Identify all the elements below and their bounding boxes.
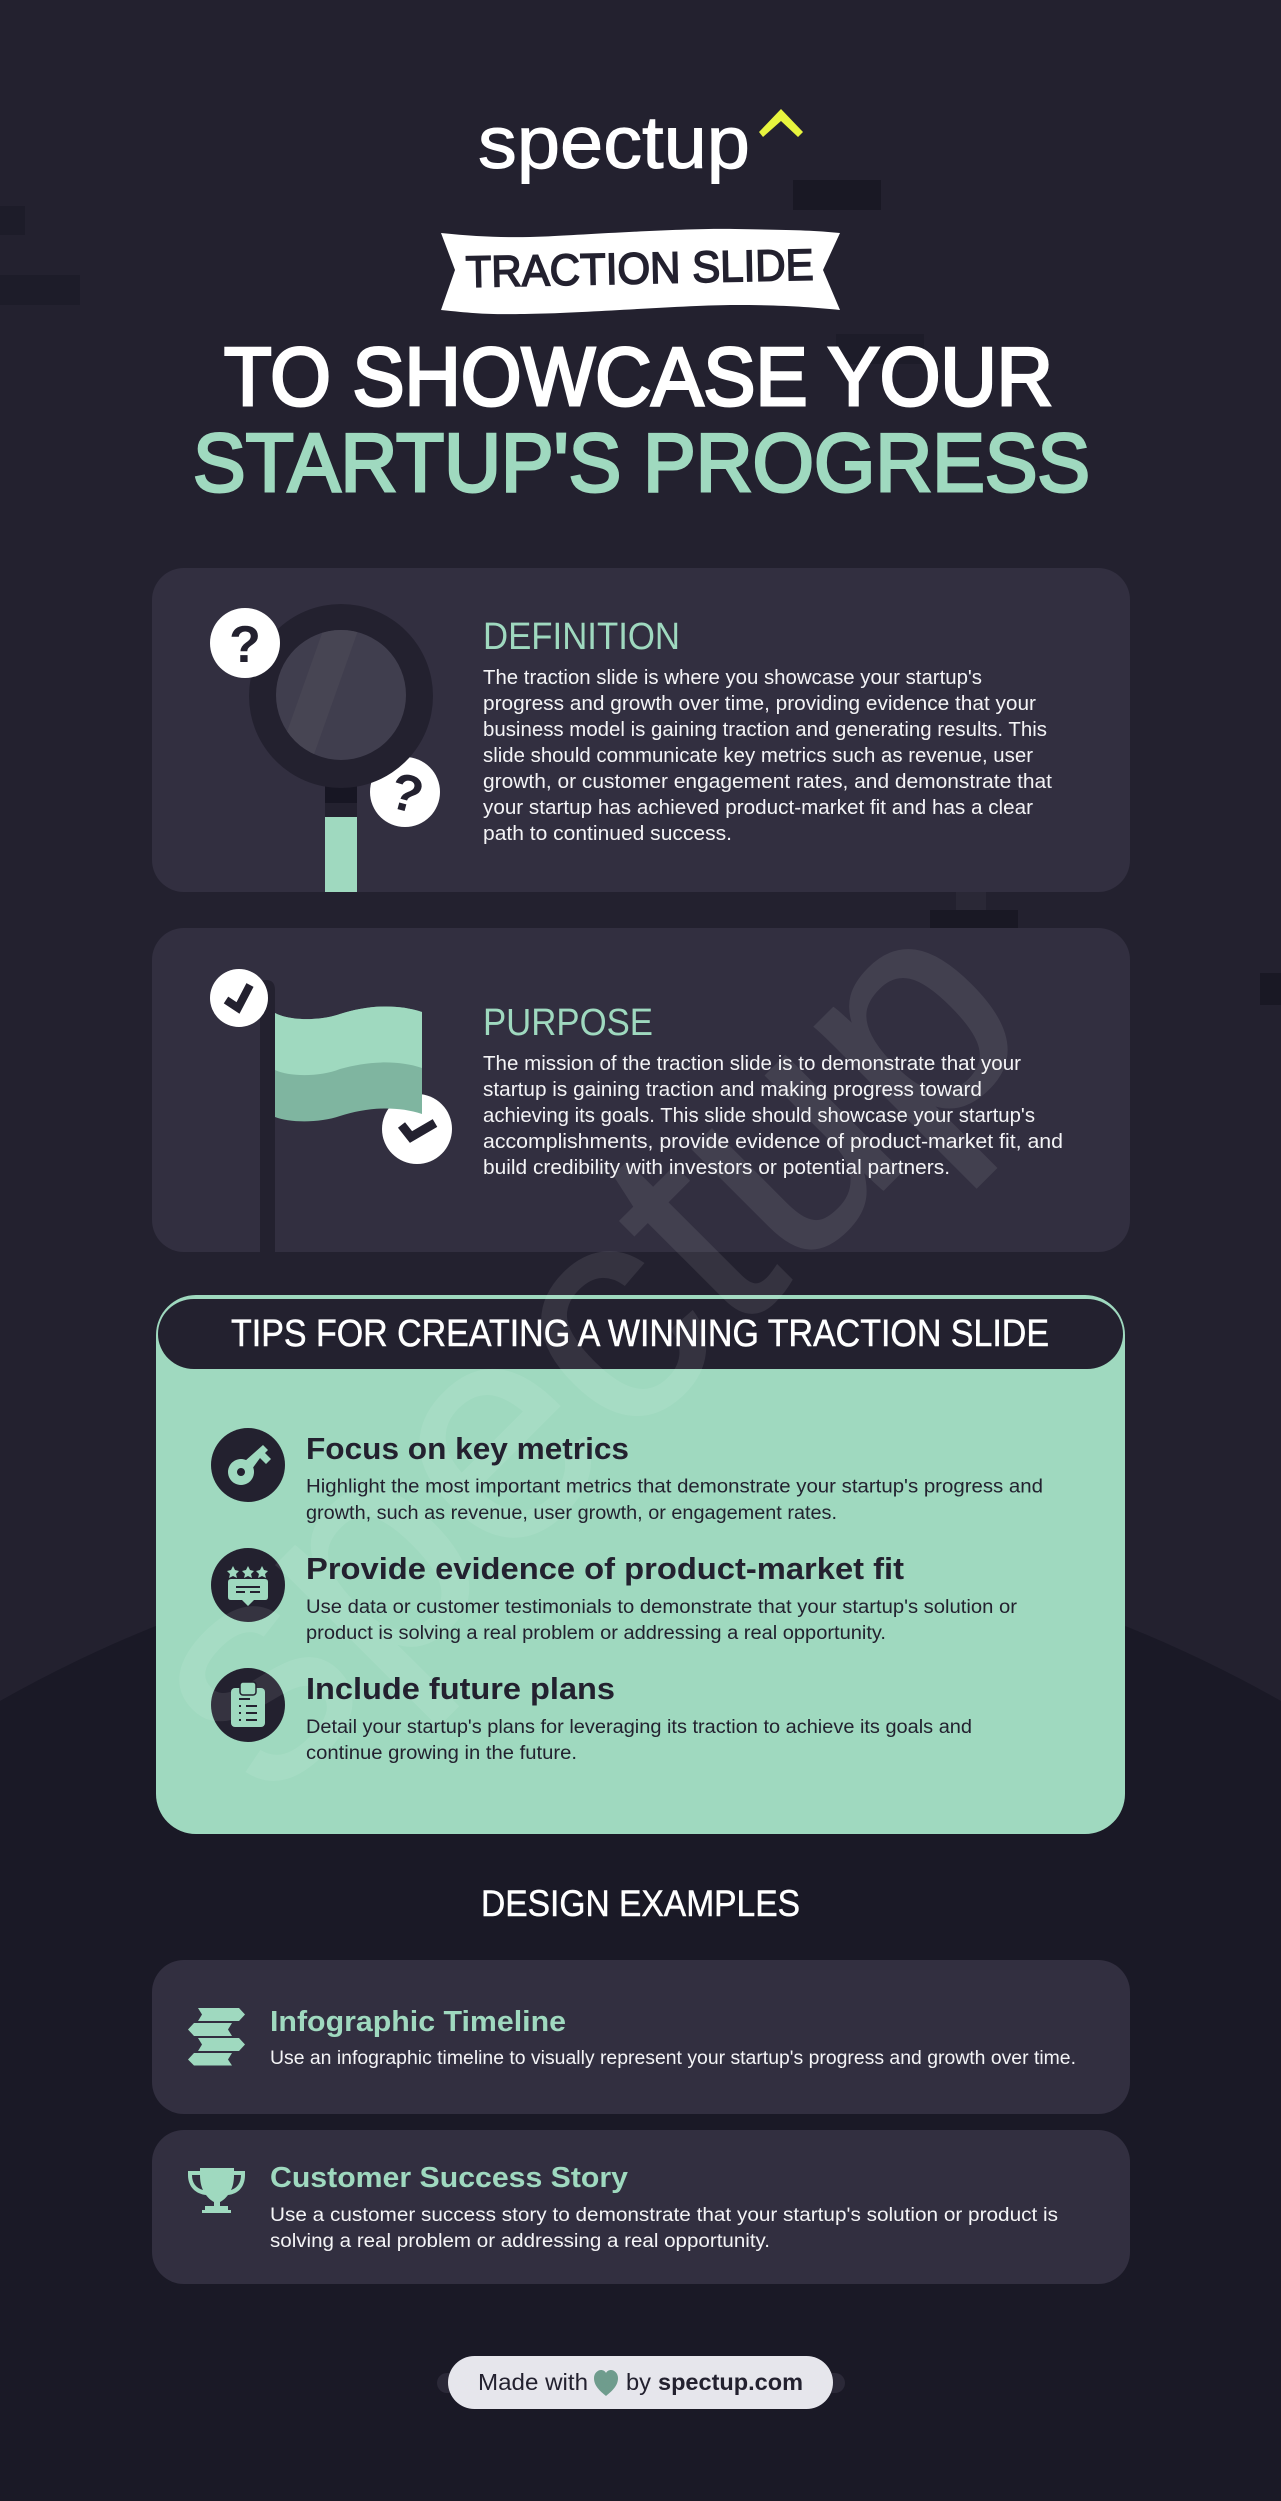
illustration: magnifying glass [210, 604, 440, 892]
text: customer story description: Use a customer success story to demonstrate that your startup's solution or product is [270, 2205, 1058, 2226]
text: definition body [483, 667, 1052, 845]
text: purpose body: accomplishments, provide evidence of product-market fit, and [483, 1131, 1063, 1153]
tip: focus on key metrics: Focus on key metrics [306, 1431, 629, 1466]
panel: infographic timeline [152, 1960, 1130, 2114]
illustration: magnifying glass: ? [229, 616, 261, 674]
icon badge: reviews [211, 1548, 285, 1622]
header bar [158, 1299, 1123, 1369]
banner: traction slide: TRACTION SLIDE [465, 241, 814, 297]
text: timeline description: Use an infographic timeline to visually represent your startup's progress and growth over time. [270, 2048, 1076, 2069]
text: definition body: your startup has achieved product-market fit and has a clear [483, 797, 1033, 819]
heading: design examples: DESIGN EXAMPLES [481, 1883, 800, 1924]
text: purpose body [483, 1053, 1063, 1179]
tip: include future plans [231, 1671, 972, 1764]
tip: provide evidence of product-market fit [227, 1551, 1018, 1644]
icon: heart [594, 2370, 618, 2396]
panel: purpose [152, 928, 1130, 1252]
tip: focus on key metrics: growth, such as revenue, user growth, or engagement rates. [306, 1503, 837, 1524]
tip: focus on key metrics [228, 1431, 1043, 1524]
icon: timeline signposts [188, 2008, 245, 2066]
text: definition body: progress and growth over time, providing evidence that your [483, 693, 1036, 715]
tip: include future plans: Include future plans [306, 1671, 615, 1706]
text: definition body: business model is gaining traction and generating results. This [483, 719, 1047, 741]
text: definition body: slide should communicate key metrics such as revenue, user [483, 745, 1033, 767]
heading: purpose: PURPOSE [483, 1002, 653, 1044]
text: customer story description: solving a real problem or addressing a real opportunity. [270, 2231, 770, 2252]
title [193, 330, 1090, 509]
icon badge: key [211, 1428, 285, 1502]
text: purpose body: achieving its goals. This slide should showcase your startup's [483, 1105, 1035, 1127]
icon badge: plans [211, 1668, 285, 1742]
icon: trophy [188, 2168, 245, 2213]
text: definition body: path to continued success. [483, 823, 732, 845]
banner: traction slide [441, 229, 840, 314]
tip: focus on key metrics: Highlight the most important metrics that demonstrate your startup's progress and [306, 1476, 1043, 1498]
icon: reviews [227, 1566, 268, 1606]
title: STARTUP'S PROGRESS [193, 416, 1090, 509]
text: purpose body: The mission of the traction slide is to demonstrate that your [483, 1053, 1021, 1075]
watermark: spectup: spectup [69, 836, 1087, 1853]
panel: definition [152, 568, 1130, 892]
icon: key [228, 1445, 271, 1485]
text: customer story description [270, 2205, 1058, 2252]
logo: spectup: spectup [478, 101, 750, 184]
icon: clipboard [231, 1682, 265, 1727]
illustration: magnifying glass: ? [384, 762, 429, 826]
tip: provide evidence of product-market fit: Use data or customer testimonials to demonstrate that your startup's solution or [306, 1597, 1018, 1618]
text: definition body: growth, or customer engagement rates, and demonstrate that [483, 771, 1052, 793]
heading: infographic timeline: Infographic Timeline [270, 2006, 566, 2038]
footer badge [437, 2356, 845, 2409]
tip: provide evidence of product-market fit: product is solving a real problem or addressing a real opportunity. [306, 1623, 886, 1644]
illustration: flag [210, 969, 452, 1252]
tip: provide evidence of product-market fit: Provide evidence of product-market fit [306, 1551, 904, 1586]
text: purpose body: build credibility with investors or potential partners. [483, 1157, 950, 1179]
icon: logo caret [759, 109, 803, 137]
heading: definition: DEFINITION [483, 616, 680, 658]
footer badge: Made with [478, 2369, 588, 2395]
heading: tips: TIPS FOR CREATING A WINNING TRACTION SLIDE [231, 1313, 1049, 1355]
panel: customer success story [152, 2130, 1130, 2284]
text: definition body: The traction slide is where you showcase your startup's [483, 667, 982, 689]
title: TO SHOWCASE YOUR [224, 330, 1053, 423]
footer badge: spectup.com [658, 2369, 803, 2395]
panel: tips [156, 1295, 1125, 1834]
tip: include future plans: continue growing in the future. [306, 1743, 577, 1764]
footer badge: by [626, 2369, 652, 2395]
text: purpose body: startup is gaining traction and making progress toward [483, 1079, 982, 1101]
heading: customer success story: Customer Success Story [270, 2162, 628, 2194]
tip: include future plans: Detail your startup's plans for leveraging its traction to achieve its goals and [306, 1717, 972, 1738]
